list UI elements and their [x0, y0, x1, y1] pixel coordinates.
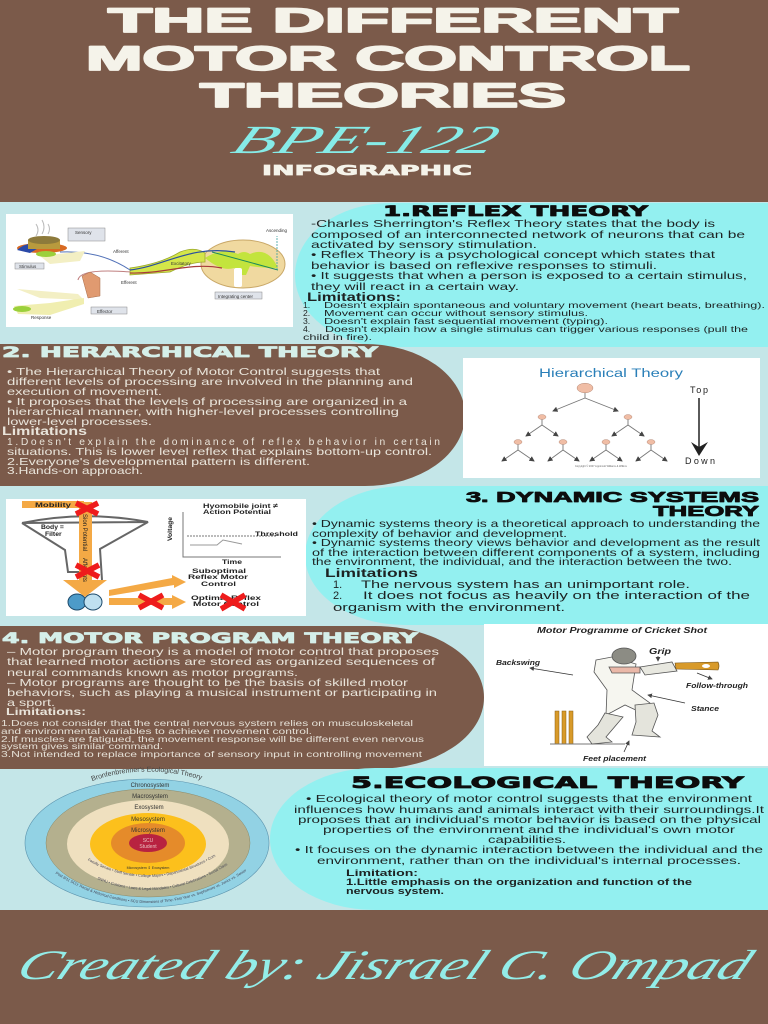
- panel: hierarchical theory: [0, 344, 465, 486]
- reflex limitations: child in fire).: [303, 332, 372, 342]
- funnel: [22, 516, 148, 580]
- ring captions: Faculty Senate • Staff Senate • College Majors • Departmental Structures • Committees: [88, 854, 216, 878]
- image: hierarchy tree diagram: [463, 358, 760, 478]
- header band: [0, 0, 768, 202]
- reflex limitations: 3.: [303, 316, 310, 326]
- motor program body text: that learned motor actions are stored as organized sequences of: [7, 657, 435, 668]
- motor program limitations: 3.Not intended to replace importance of sensory input in controlling movement: [1, 749, 423, 759]
- stumps: [555, 711, 573, 744]
- dynamic systems limitations: organism with the environment.: [333, 602, 565, 614]
- hierarchical theory body text: hierarchical manner, with higher-level processes controlling: [7, 407, 399, 418]
- small diagram labels: Integrating center: [218, 294, 254, 299]
- microsystem ring: Microsystem: [131, 828, 165, 834]
- ecological body text: [294, 794, 764, 867]
- small diagram labels: Sensory: [75, 230, 92, 235]
- voltage chart: [167, 503, 298, 566]
- funnel label: Filter: [45, 531, 62, 538]
- chronosystem ring: [25, 779, 269, 907]
- heading: dynamic systems theory: 3. DYNAMIC SYSTEMS: [466, 490, 760, 506]
- afferent and efferent nerves: [60, 252, 130, 280]
- reflex limitations: Movement can occur without sensory stimulus.: [324, 308, 588, 318]
- mesosystem ring: Microsystem ⇕ Exosystem: [127, 866, 169, 870]
- voltage chart: Voltage: [167, 517, 174, 541]
- top-down arrow: [685, 385, 715, 466]
- ecological limitation: [346, 868, 692, 896]
- dynamic systems limitations: Limitations: [325, 568, 418, 580]
- image: cricket shot diagram: [484, 624, 768, 766]
- red crosses on channel: [76, 503, 99, 577]
- heading: reflex theory: 1.REFLEX THEORY: [383, 204, 649, 220]
- reflex theory body text: they will react in a certain way.: [311, 282, 519, 293]
- chronosystem ring: Chronosystem: [131, 783, 169, 789]
- title: MOTOR CONTROL: [86, 40, 690, 78]
- reflex limitations: 4.: [303, 324, 310, 334]
- top-down arrow: Down: [685, 456, 715, 466]
- dynamic systems limitations: 1.: [333, 579, 342, 591]
- dynamic systems body text: of the interaction between different components of a system, including: [312, 548, 760, 559]
- small diagram labels: Efferent: [121, 280, 137, 285]
- microsystem ring: [111, 823, 185, 863]
- small diagram labels: Stimulus: [19, 264, 37, 269]
- panel: reflex theory: [295, 203, 768, 347]
- macrosystem ring: [46, 789, 250, 897]
- hierarchical theory body text: 3.Hands-on approach.: [7, 466, 143, 477]
- copyright line: Copyright © 2007 Lippincott Williams & Wilkins: [575, 465, 628, 468]
- motor program limitations: 2.If muscles are fatigued, the movement response will be different even nervous: [1, 734, 424, 744]
- motor program body text: neural commands known as motor programs.: [7, 668, 298, 679]
- muscle: [82, 272, 100, 298]
- ring captions: Post-9/11 SCU: Racial & Historical Conditions • SCU Dimensions of Time: First Year vs. Sophomore vs. Junior vs. Senior: [56, 869, 246, 903]
- small diagram labels: Response: [31, 315, 52, 320]
- reflex theory body text: [311, 219, 747, 293]
- reflex theory body text: composed of an interconnected network of neurons that can be: [311, 230, 745, 241]
- motor program limitations: 1.Does not consider that the central nervous system relies on musculoskeletal: [1, 718, 413, 728]
- small diagram labels: [19, 228, 288, 320]
- arm response: [13, 289, 84, 315]
- ecological body text: influences how humans and animals interact with their surroundings.It: [294, 805, 764, 816]
- reflex limitations: Doesn't explain spontaneous and voluntary movement (heart beats, breathing).: [324, 300, 765, 310]
- reflex theory body text: • It suggests that when a person is exposed to a certain stimulus,: [311, 271, 747, 282]
- ecological limitation: Limitation:: [346, 868, 418, 878]
- ecological body text: capabilities.: [488, 835, 566, 846]
- motor program body text: a sport.: [7, 698, 55, 709]
- heading: dynamic systems theory: [466, 490, 760, 520]
- annotation labels: Backswing: [496, 660, 541, 667]
- student center: [129, 834, 167, 852]
- reflex theory body text: -Charles Sherrington's Reflex Theory states that the body is: [311, 219, 715, 230]
- dynamic systems body text: • Dynamic systems theory views behavior and development as the result: [312, 538, 760, 549]
- hierarchical theory body text: • It proposes that the levels of processing are organized in a: [7, 397, 407, 408]
- outcome labels: Motor Control: [193, 601, 259, 608]
- ecological body text: environment, rather than on the individual's internal processes.: [317, 856, 741, 867]
- dynamic systems body text: the environment, the individual, and the interaction between the two.: [312, 557, 732, 568]
- small diagram labels: Excitatory: [171, 261, 192, 266]
- mesosystem ring: Mesosystem: [131, 817, 165, 823]
- small diagram labels: Effector: [97, 309, 113, 314]
- outcome labels: Reflex Motor: [188, 574, 249, 581]
- hierarchical theory body text: different levels of processing are involved in the planning and: [7, 377, 413, 388]
- reflex limitations: Doesn't explain how a single stimulus can trigger various responses (pull the: [325, 324, 748, 334]
- image: ecological systems rings: Bronfenbrenner's Ecological Theory: [91, 766, 202, 781]
- motor program body text: [6, 647, 439, 718]
- credit line: Created by: Jisrael C. Ompad: [10, 942, 762, 989]
- outcome labels: Suboptimal: [192, 568, 246, 575]
- ring captions: [56, 854, 246, 903]
- hierarchical theory body text: Limitations: [2, 426, 87, 438]
- footer band: [0, 910, 768, 1024]
- title: [86, 2, 690, 115]
- panel: motor program theory: [0, 626, 484, 769]
- panel: ecological theory: [270, 768, 768, 910]
- ecological body text: proposes that an individual's motor behavior is based on the physical: [298, 815, 761, 826]
- batsman figure: [587, 648, 677, 744]
- reflex theory body text: activated by sensory stimulation.: [311, 240, 537, 251]
- vertical orange channel: Afferents: [81, 558, 87, 582]
- mobility bar: Mobility: [35, 502, 71, 509]
- annotation labels: Feet placement: [583, 756, 647, 763]
- reflex limitations: Doesn't explain fast sequential movement (typing).: [324, 316, 608, 326]
- hierarchical theory body text: 1.Doesn't explain the dominance of reflex behavior in certain: [7, 437, 440, 448]
- student center: Student: [139, 844, 157, 850]
- motor program limitations: system gives similar command.: [1, 741, 163, 751]
- small diagram labels: Ascending: [266, 228, 288, 233]
- tree nodes: [514, 383, 655, 444]
- motor program body text: Limitations:: [6, 707, 86, 718]
- ecological body text: • It focuses on the dynamic interaction between the individual and the: [295, 845, 763, 856]
- outcome labels: [188, 568, 261, 608]
- exosystem ring: Exosystem: [134, 805, 164, 811]
- hierarchical theory body text: situations. This is lower level reflex that explains bottom-up control.: [7, 447, 432, 458]
- reflex theory body text: • Reflex Theory is a psychological concept which states that: [311, 250, 715, 261]
- tree branches: [502, 398, 667, 461]
- voltage chart: Threshold: [255, 531, 298, 538]
- hierarchical theory body text: [2, 367, 440, 477]
- mesosystem ring: [90, 813, 206, 875]
- hierarchical theory body text: 2.Everyone's developmental pattern is different.: [7, 457, 310, 468]
- motor program body text: behaviors, such as playing a musical instrument or participating in: [7, 688, 437, 699]
- hierarchical theory body text: • The Hierarchical Theory of Motor Control suggests that: [7, 367, 380, 378]
- motor program body text: – Motor program theory is a model of motor control that proposes: [7, 647, 439, 658]
- image: ecological systems rings: [24, 766, 270, 908]
- voltage chart: Action Potential: [203, 509, 271, 516]
- dynamic systems limitations: It does not focus as heavily on the interaction of the: [363, 590, 750, 602]
- dynamic systems limitations: 2.: [333, 590, 342, 602]
- diagram title: Motor Programme of Cricket Shot: [537, 626, 707, 635]
- bat: [675, 662, 719, 670]
- tree stems: [518, 392, 651, 450]
- reflex limitations: 2.: [303, 308, 310, 318]
- motor program body text: – Motor programs are thought to be the basis of skilled motor: [7, 678, 409, 689]
- motor program limitations: [1, 718, 424, 759]
- dynamic systems body text: complexity of behavior and development.: [312, 529, 567, 540]
- ecological body text: • Ecological theory of motor control suggests that the environment: [306, 794, 752, 805]
- voltage chart: Hyomobile joint ≠: [203, 503, 278, 510]
- dynamic systems body text: • Dynamic systems theory is a theoretical approach to understanding the: [312, 519, 760, 530]
- reflex theory body text: behavior is based on reflexive responses to stimuli.: [311, 261, 657, 272]
- small diagram labels: Afferent: [113, 249, 129, 254]
- heading: motor program theory: 4. MOTOR PROGRAM THEORY: [2, 631, 419, 647]
- ecological body text: properties of the environment and the individual's own motor: [323, 825, 736, 836]
- reflex limitations: 1.: [303, 300, 310, 310]
- outcome labels: Control: [201, 581, 236, 588]
- title: THE DIFFERENT: [108, 2, 678, 40]
- exosystem ring: [67, 800, 229, 888]
- heading: hierarchical theory: 2. HERARCHICAL THEORY: [2, 345, 379, 361]
- image: reflex arc diagram: [6, 214, 293, 327]
- annotation labels: [496, 646, 748, 763]
- annotation labels: Follow-through: [686, 683, 748, 690]
- title: THEORIES: [200, 77, 566, 115]
- reflex limitations: [303, 290, 765, 342]
- brain icon: [68, 594, 102, 610]
- outcome arrows: [109, 575, 186, 609]
- ecological limitation: nervous system.: [346, 886, 444, 896]
- spinal cord cross-section: [130, 236, 285, 288]
- ecological limitation: 1.Little emphasis on the organization and function of the: [346, 877, 692, 887]
- hierarchical theory body text: execution of movement.: [7, 387, 162, 398]
- red crosses on outcome: [139, 595, 245, 609]
- dynamic systems limitations: The nervous system has an unimportant role.: [361, 579, 690, 591]
- mobility bar: [22, 501, 84, 509]
- image: funnel reflex control diagram: [6, 499, 306, 616]
- reflex limitations: Limitations:: [307, 290, 401, 304]
- top-down arrow: Top: [690, 385, 708, 395]
- small label boxes: [15, 228, 262, 314]
- vertical orange channel: Sion Potential: [81, 514, 87, 551]
- annotation labels: Grip: [649, 646, 671, 656]
- outcome labels: Optimal Reflex: [191, 595, 261, 602]
- hierarchical theory body text: lower-level processes.: [7, 417, 152, 428]
- panel: dynamic systems theory: [305, 486, 768, 625]
- course code: BPE-122: [225, 119, 506, 163]
- funnel label: Body =: [41, 524, 64, 531]
- annotation labels: Stance: [691, 706, 719, 713]
- dynamic systems limitations: [325, 568, 750, 614]
- student center: SCU: [143, 838, 154, 844]
- heading: dynamic systems theory: THEORY: [653, 504, 760, 520]
- voltage chart: Time: [222, 559, 242, 566]
- subtitle: INFOGRAPHIC: [262, 163, 472, 179]
- annotation arrows: [530, 656, 712, 752]
- heading: ecological theory: 5.ECOLOGICAL THEORY: [351, 773, 745, 792]
- ring captions: SNHU • Customs • Laws & Legal Mandates • Cultural Celebrations • Social Class: [98, 864, 228, 891]
- hot dish stimulus: [17, 220, 85, 264]
- diagram title: Hierarchical Theory: [539, 368, 683, 380]
- funnel label: [41, 524, 64, 538]
- vertical orange channel: [63, 502, 107, 597]
- motor program limitations: and environmental variables to achieve movement control.: [1, 726, 312, 736]
- dynamic systems body text: [312, 519, 760, 568]
- macrosystem ring: Macrosystem: [132, 794, 168, 800]
